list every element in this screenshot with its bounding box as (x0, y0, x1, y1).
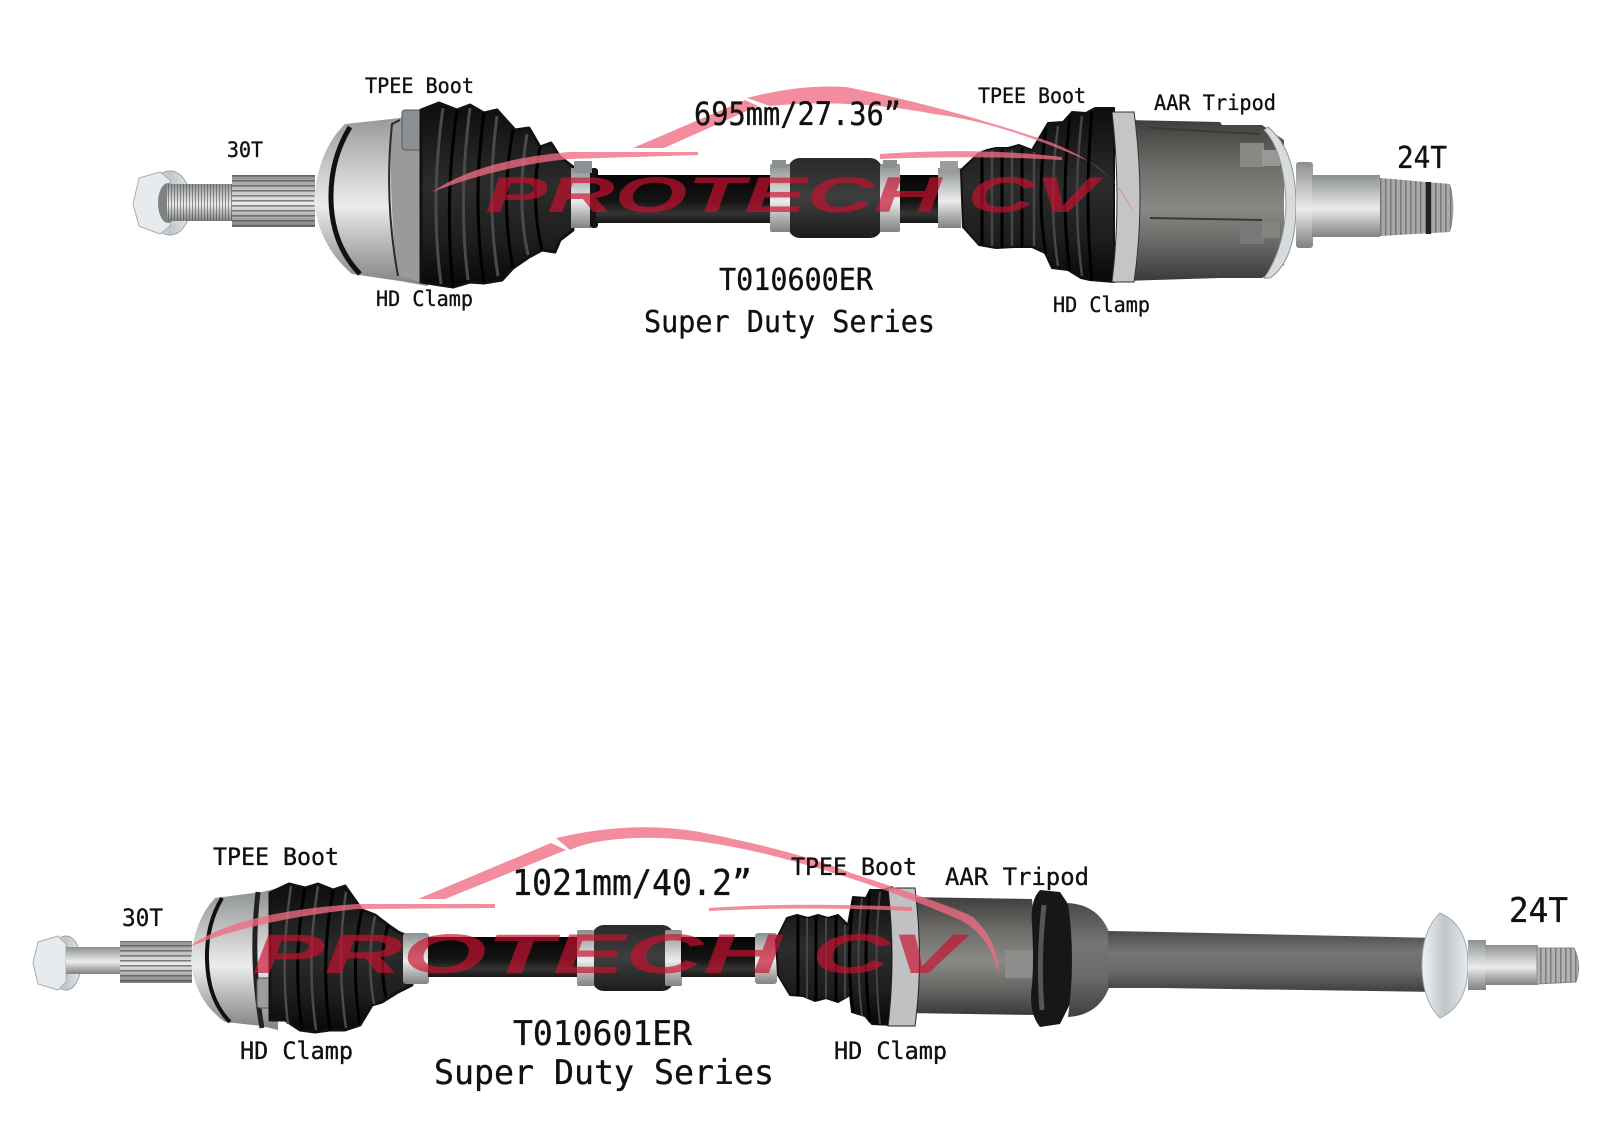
support disc (1422, 913, 1468, 1018)
logo watermark: car outline (432, 86, 1134, 214)
flange (1031, 890, 1072, 1027)
spline 30T (232, 175, 315, 227)
logo watermark: PROTECH CV: PROTECH CV (485, 167, 1104, 223)
label: HD Clamp right: HD Clamp (834, 1037, 947, 1065)
logo watermark: car outline (189, 827, 999, 975)
label: TPEE Boot right: TPEE Boot (978, 84, 1086, 108)
label: HD Clamp left: HD Clamp (240, 1037, 353, 1065)
AAR tripod housing (1125, 120, 1284, 281)
spline 30T (120, 941, 192, 983)
outer CV joint (314, 108, 428, 286)
label: HD Clamp left: HD Clamp (376, 287, 473, 311)
clamp buckle (402, 110, 424, 150)
small clamp, outer boot (571, 161, 598, 228)
HD clamp collar (888, 888, 920, 1026)
black shaft, right (681, 937, 757, 977)
threaded stem (167, 184, 233, 221)
label: length: 695mm/27.36” (694, 95, 901, 133)
label: 24T: 24T (1397, 141, 1447, 176)
washer nut, left end (33, 936, 81, 990)
stub shaft (1468, 940, 1538, 990)
label: HD Clamp right: HD Clamp (1053, 293, 1150, 317)
damper (577, 925, 682, 991)
black shaft, left (596, 175, 772, 223)
boot, inner (776, 887, 892, 1025)
label: length: 1021mm/40.2” (512, 863, 752, 904)
boot, inner (961, 108, 1114, 282)
series name: Super Duty Series (434, 1053, 774, 1093)
washer nut, left end (133, 171, 191, 235)
label: AAR Tripod: AAR Tripod (1154, 91, 1276, 115)
series name: Super Duty Series (644, 305, 935, 340)
damper (770, 158, 900, 238)
spline 24T (1380, 178, 1454, 236)
axle drawing: T010601ER (33, 884, 1579, 1032)
part number: T010600ER (719, 263, 874, 298)
boot, outer (270, 884, 412, 1032)
housing end disc (1264, 127, 1296, 278)
stub shaft (1296, 162, 1380, 248)
clamp buckle (257, 978, 275, 1008)
part number: T010601ER (513, 1014, 693, 1054)
outer CV joint (191, 888, 278, 1030)
label: 24T: 24T (1509, 891, 1568, 931)
label: TPEE Boot left: TPEE Boot (213, 843, 339, 871)
label: AAR Tripod: AAR Tripod (945, 863, 1089, 891)
small clamp, inner boot (755, 933, 777, 984)
boot, outer (421, 103, 573, 287)
axle drawing: T010600ER (133, 103, 1454, 287)
AAR tripod housing (905, 897, 1036, 1015)
panel: T010601ER axle (33, 827, 1579, 1093)
neck (66, 947, 122, 974)
bell housing (1068, 903, 1110, 1017)
logo watermark: PROTECH CV: PROTECH CV (252, 922, 971, 985)
long intermediate shaft (1108, 931, 1440, 992)
small clamp, outer boot (403, 933, 429, 984)
label: 30T: 30T (227, 138, 263, 162)
HD clamp collar (1112, 112, 1140, 282)
spline 24T (1537, 948, 1579, 984)
black shaft, left (428, 937, 578, 977)
panel: T010600ER axle (133, 74, 1454, 340)
label: TPEE Boot right: TPEE Boot (791, 853, 917, 881)
label: TPEE Boot left: TPEE Boot (365, 74, 474, 98)
black shaft, right (900, 175, 940, 223)
label: 30T: 30T (122, 904, 163, 932)
small clamp, inner boot (938, 161, 961, 228)
